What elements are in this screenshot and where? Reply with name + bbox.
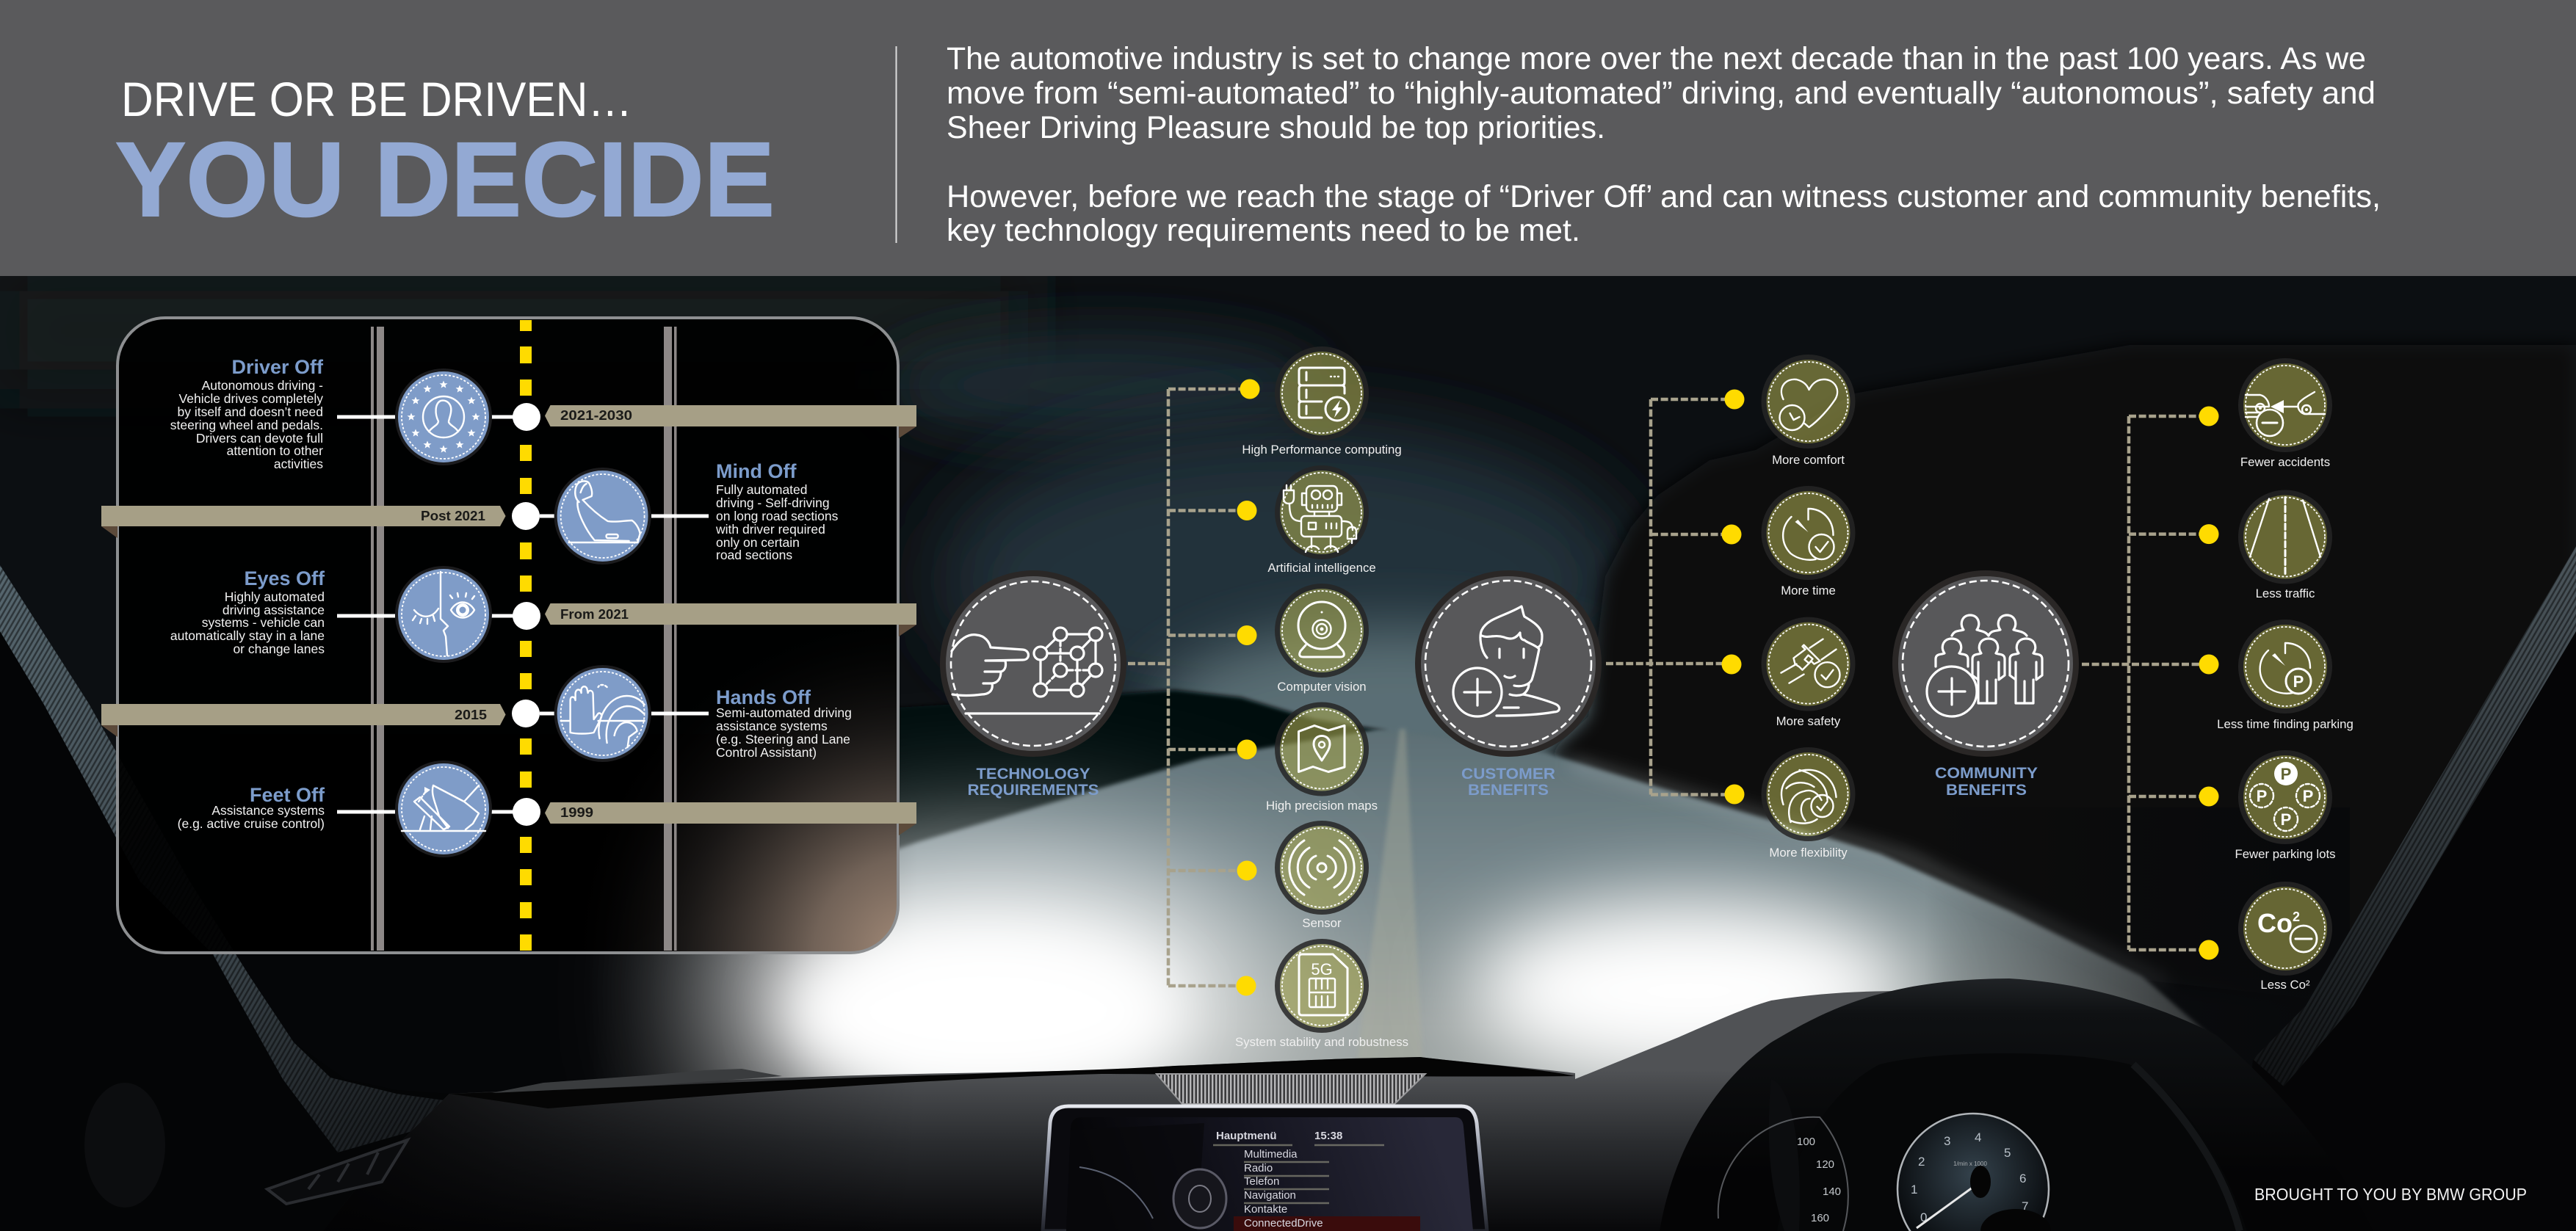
screen menu text: Navigation	[1244, 1189, 1296, 1202]
screen menu text: Radio	[1244, 1162, 1273, 1174]
heading: technology requirements: TECHNOLOGY	[977, 765, 1090, 782]
text: feet off	[178, 784, 325, 831]
heading: community benefits	[1935, 764, 2038, 799]
tachometer gauge: 4	[1975, 1130, 1981, 1144]
item: sensor	[1278, 824, 1366, 930]
item: more time	[1764, 489, 1853, 598]
item: fewer parking lots: P	[2281, 810, 2291, 829]
centre speaker grill	[1157, 1074, 1425, 1104]
text: eyes off: automatically stay in a lane	[170, 628, 325, 643]
text: eyes off: or change lanes	[233, 642, 325, 656]
tachometer gauge: 2	[1918, 1155, 1925, 1169]
timeline nodes	[512, 403, 540, 826]
text: hands off: Hands Off	[716, 686, 811, 708]
ribbon: post 2021	[101, 506, 506, 538]
speaker	[84, 1083, 165, 1208]
yellow centre line	[520, 320, 532, 951]
item: less time finding parking: Less time finding parking	[2217, 717, 2354, 731]
left A-pillar carbon strip	[0, 565, 449, 1152]
intro paragraph: Sheer Driving Pleasure should be top priorities.	[947, 110, 1605, 145]
dashboard top surface	[323, 991, 1909, 1231]
connector: community	[2082, 416, 2199, 950]
item: less traffic	[2241, 493, 2329, 600]
text: mind off: Mind Off	[716, 460, 797, 482]
item: fewer parking lots: P	[2257, 787, 2267, 805]
connector: customer	[1606, 399, 1726, 794]
item: more safety	[1764, 620, 1853, 728]
windscreen base shadow line	[449, 1057, 1575, 1108]
intro paragraph: The automotive industry is set to change more over the next decade than in the past 100 years. As we	[947, 41, 2366, 76]
text: eyes off: driving assistance	[222, 603, 325, 617]
item: more flexibility: More flexibility	[1769, 846, 1848, 860]
speedometer gauge: 100	[1797, 1136, 1815, 1148]
heading: customer benefits: CUSTOMER	[1461, 765, 1555, 782]
ribbon: 2021-2030: 2021-2030	[560, 408, 632, 423]
item: sensor: Sensor	[1302, 916, 1342, 930]
night road background scene	[0, 272, 2576, 1231]
icon: hands off	[554, 665, 651, 762]
heading: community benefits: COMMUNITY	[1935, 764, 2038, 782]
icon: driver off	[395, 368, 492, 465]
heading: customer benefits: BENEFITS	[1468, 781, 1549, 799]
ribbon: 2021-2030	[545, 405, 916, 438]
heading: technology requirements: REQUIREMENTS	[968, 781, 1099, 799]
item: system stability and robustness: System stability and robustness	[1235, 1035, 1408, 1049]
item: system stability and robustness	[1235, 941, 1408, 1049]
text: feet off: Feet Off	[250, 784, 325, 806]
heading: community benefits: BENEFITS	[1946, 781, 2027, 799]
connector lines	[337, 415, 709, 813]
item: less co2	[2241, 884, 2329, 992]
heading: technology requirements	[968, 765, 1099, 799]
screen menu text: Multimedia	[1244, 1148, 1298, 1161]
hub icon: community	[1892, 570, 2079, 757]
text: hands off: Control Assistant)	[716, 745, 817, 760]
item: more time: More time	[1781, 584, 1836, 598]
text: driver off: Autonomous driving -	[202, 378, 323, 393]
hub icon: customer	[1415, 570, 1602, 757]
hub icon: technology	[940, 570, 1126, 757]
speedometer gauge: 120	[1816, 1158, 1834, 1171]
item: more comfort	[1764, 357, 1853, 467]
item: less co2: Co	[2257, 908, 2293, 938]
tachometer gauge	[1897, 1114, 2051, 1231]
item: less time finding parking: P	[2293, 672, 2304, 691]
ribbon: from 2021	[545, 603, 916, 636]
tachometer gauge: 0	[1920, 1210, 1927, 1224]
item: more comfort: More comfort	[1772, 453, 1845, 467]
tachometer gauge: 1/min x 1000	[1953, 1161, 1987, 1167]
text: driver off	[170, 356, 324, 471]
dashboard hump	[492, 1069, 782, 1093]
item: less co2: Less Co²	[2260, 978, 2310, 992]
connector: technology	[1128, 389, 1241, 986]
section: customer benefits	[1415, 357, 1853, 860]
text: driver off: Driver Off	[231, 356, 324, 378]
text: feet off: (e.g. active cruise control)	[178, 816, 325, 831]
text: driver off: Drivers can devote full	[196, 431, 323, 446]
text: driver off: activities	[274, 457, 323, 471]
title line: you decide: YOU DECIDE	[115, 120, 775, 239]
text: mind off	[715, 460, 839, 562]
header band	[0, 0, 2576, 276]
item: high precision maps	[1266, 705, 1378, 813]
text: driver off: steering wheel and pedals.	[170, 418, 323, 432]
icon: eyes off	[395, 566, 492, 663]
yellow dots	[2199, 407, 2219, 960]
item: high precision maps: High precision maps	[1266, 799, 1378, 813]
infotainment screen	[1043, 1106, 1487, 1231]
item: more safety: More safety	[1776, 714, 1841, 728]
text: eyes off	[170, 567, 325, 656]
item: fewer parking lots: P	[2303, 787, 2313, 805]
icon: mind off	[554, 468, 651, 564]
intro paragraph: However, before we reach the stage of “Driver Off’ and can witness customer and community benefits,	[947, 179, 2381, 214]
intro paragraph: key technology requirements need to be met.	[947, 213, 1580, 248]
panel: automation timeline road	[101, 318, 916, 953]
tachometer gauge: 3	[1944, 1134, 1950, 1148]
speedometer gauge	[1718, 1117, 1848, 1231]
tachometer gauge: 7	[2022, 1199, 2028, 1213]
intro paragraph	[947, 41, 2381, 248]
item: high performance computing	[1242, 349, 1402, 457]
screen menu text: 15:38	[1314, 1130, 1342, 1142]
item: fewer accidents	[2240, 361, 2330, 469]
heading: customer benefits	[1461, 765, 1555, 799]
screen menu text: Telefon	[1244, 1175, 1279, 1188]
item: fewer parking lots	[2235, 753, 2336, 861]
dashboard and car interior	[0, 546, 2576, 1231]
ribbon: from 2021: From 2021	[560, 607, 629, 622]
right A-pillar carbon strip	[2253, 546, 2576, 1086]
text: driver off: attention to other	[227, 443, 323, 458]
ribbon: 1999: 1999	[560, 805, 593, 820]
text: eyes off: Highly automated	[225, 589, 325, 604]
tachometer gauge: 5	[2004, 1146, 2011, 1160]
text: eyes off: systems - vehicle can	[202, 615, 325, 630]
item: fewer parking lots: Fewer parking lots	[2235, 847, 2336, 861]
item: system stability and robustness: 5G	[1311, 960, 1333, 978]
title line: drive or be driven: DRIVE OR BE DRIVEN…	[121, 72, 632, 126]
tachometer gauge: 1	[1911, 1183, 1917, 1196]
ribbon: 2015: 2015	[455, 708, 487, 722]
steering wheel	[1660, 978, 2373, 1231]
air vent	[267, 1140, 408, 1204]
text: driver off: by itself and doesn’t need	[178, 404, 323, 419]
item: less traffic: Less traffic	[2256, 587, 2315, 600]
screen menu text: ConnectedDrive	[1244, 1217, 1323, 1230]
screen menu text: Hauptmenü	[1216, 1130, 1276, 1142]
yellow dots	[1721, 389, 1745, 805]
ribbon: 1999	[545, 802, 916, 835]
credit line: BROUGHT TO YOU BY BMW GROUP	[2254, 1185, 2527, 1204]
item: fewer parking lots: P	[2281, 765, 2291, 783]
item: less co2: 2	[2293, 909, 2300, 924]
item: computer vision	[1277, 586, 1367, 694]
text: feet off: Assistance systems	[211, 803, 325, 818]
text: driver off: Vehicle drives completely	[179, 391, 323, 406]
item: computer vision: Computer vision	[1277, 680, 1367, 694]
text: hands off	[716, 686, 852, 760]
item: high performance computing: High Performance computing	[1242, 443, 1402, 457]
text: mind off: Fully automated	[716, 482, 808, 497]
item: fewer accidents: Fewer accidents	[2240, 455, 2330, 469]
text: mind off: road sections	[716, 548, 792, 562]
item: artificial intelligence	[1267, 468, 1376, 575]
section: technology requirements	[940, 349, 1408, 1049]
yellow dots	[1237, 379, 1260, 995]
intro paragraph: move from “semi-automated” to “highly-automated” driving, and eventually “autonomous”, safety and	[947, 76, 2376, 111]
ribbon: post 2021: Post 2021	[421, 509, 485, 523]
speedometer gauge: 140	[1823, 1185, 1841, 1198]
text: mind off: only on certain	[716, 535, 800, 550]
text: mind off: on long road sections	[716, 509, 839, 523]
text: eyes off: Eyes Off	[244, 567, 325, 589]
screen menu text: Kontakte	[1244, 1203, 1287, 1216]
section: community benefits	[1892, 361, 2354, 992]
item: artificial intelligence: Artificial intelligence	[1267, 561, 1376, 575]
text: hands off: Semi-automated driving	[716, 705, 852, 720]
item: more flexibility	[1764, 750, 1853, 860]
text: hands off: assistance systems	[716, 719, 828, 733]
text: mind off: driving - Self-driving	[716, 495, 830, 510]
item: less time finding parking	[2217, 622, 2354, 731]
text: mind off: with driver required	[715, 522, 825, 537]
speedometer gauge: 160	[1811, 1212, 1829, 1224]
icon: feet off	[395, 760, 492, 857]
text: hands off: (e.g. Steering and Lane	[716, 732, 850, 747]
ribbon: 2015	[101, 704, 506, 737]
tachometer gauge: 6	[2019, 1172, 2026, 1185]
